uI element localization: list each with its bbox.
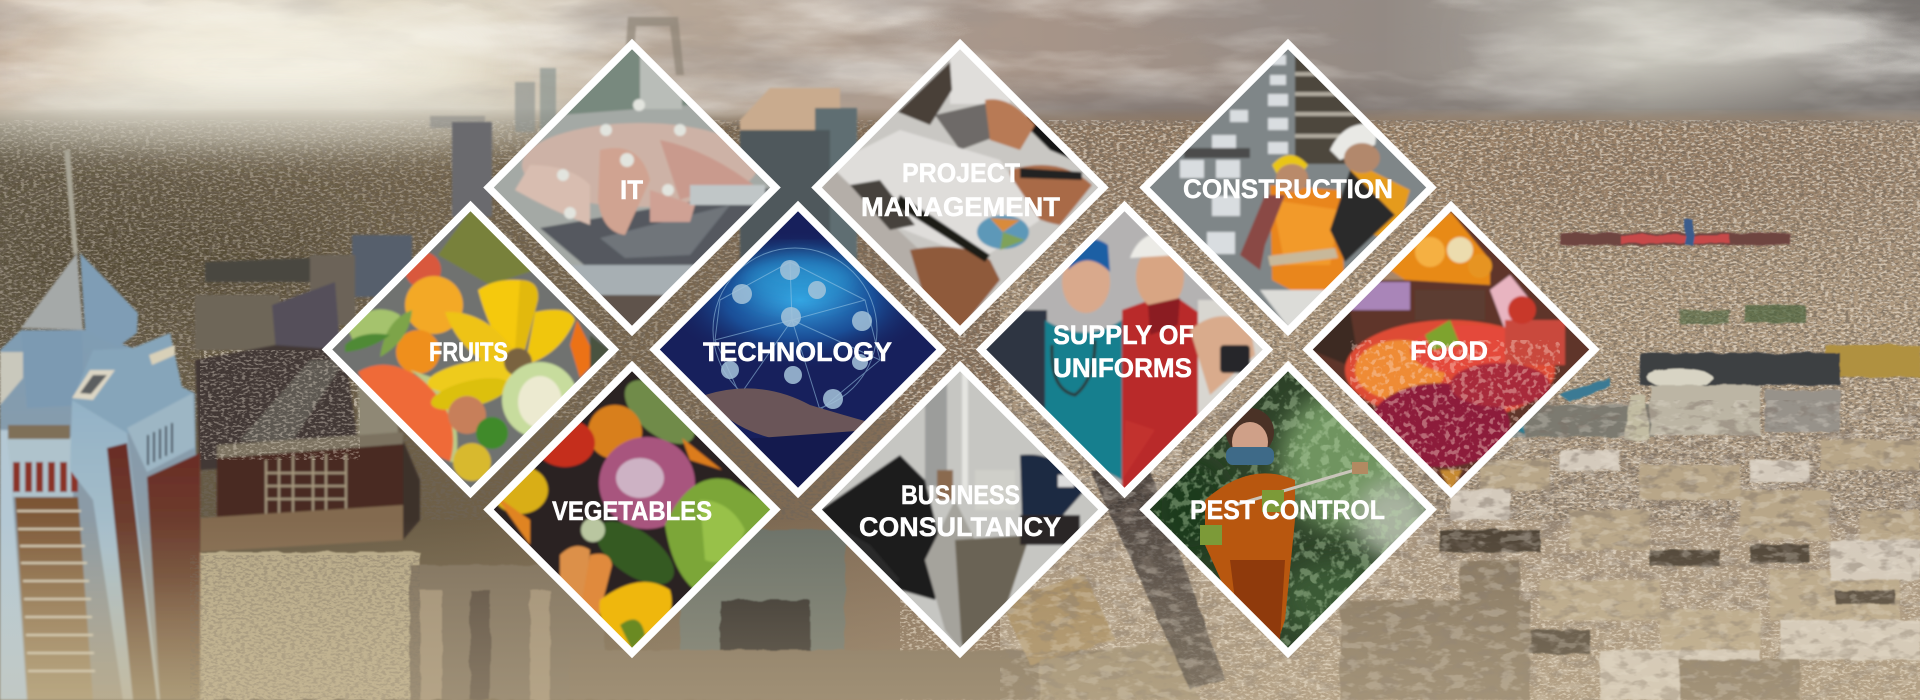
- diamond border: [488, 366, 776, 653]
- label: IT: [620, 175, 643, 205]
- panel: Fruits: [320, 200, 620, 500]
- left tower: [0, 150, 200, 700]
- label: CONSTRUCTION: [1183, 174, 1393, 204]
- panel: Construction: [1140, 40, 1440, 340]
- label: [861, 158, 1061, 222]
- diamond border: [327, 206, 614, 493]
- photo: workers at building site: [1150, 50, 1426, 326]
- panel: Technology: [650, 200, 950, 500]
- foreground parking and buildings: [195, 470, 1225, 700]
- photo: assorted vegetables: [494, 371, 770, 648]
- photo: digital network globe over hand: [660, 212, 936, 488]
- photo: workers in uniforms: [986, 212, 1263, 488]
- diamond border: [981, 206, 1268, 493]
- photo: business meeting: [822, 372, 1098, 648]
- panel: Supply of Uniforms: [975, 200, 1275, 500]
- diamond border: [1144, 44, 1432, 331]
- bottom haze: [0, 547, 1920, 700]
- panel: Pest Control: [1140, 360, 1440, 660]
- sky with storm clouds: [0, 0, 1920, 128]
- label: TECHNOLOGY: [703, 337, 892, 367]
- label: CONSULTANCY: [859, 512, 1061, 542]
- panel: IT: [480, 40, 780, 340]
- label: MANAGEMENT: [861, 192, 1061, 222]
- road traffic texture: [200, 350, 360, 460]
- photo: worker spraying plants: [1150, 372, 1426, 648]
- label: VEGETABLES: [552, 496, 712, 526]
- photo: fruit arrangement: [332, 212, 608, 488]
- horizon haze on the left: [0, 98, 600, 146]
- label: [859, 480, 1061, 542]
- label: [1053, 320, 1194, 383]
- panel: Vegetables: [480, 360, 780, 660]
- diamond border: [1144, 366, 1432, 653]
- label: PEST CONTROL: [1190, 495, 1385, 525]
- panel: Food: [1300, 200, 1600, 500]
- photo: hands on keyboard: [494, 50, 770, 326]
- diamond border: [488, 44, 776, 331]
- label: PROJECT: [902, 158, 1020, 188]
- label: BUSINESS: [901, 480, 1020, 510]
- photo: market stall: [1312, 212, 1590, 488]
- diamond border: [816, 366, 1104, 653]
- label: UNIFORMS: [1053, 353, 1192, 383]
- diamond border: [654, 206, 942, 493]
- panel: Business Consultancy: [810, 360, 1110, 660]
- label: FRUITS: [429, 337, 508, 367]
- label: SUPPLY OF: [1053, 320, 1194, 350]
- label: FOOD: [1410, 336, 1488, 366]
- left mid buildings and road: [195, 235, 420, 552]
- photo: documents and hands: [822, 50, 1098, 326]
- diamond border: [816, 44, 1104, 331]
- kingdom centre and far towers: [430, 17, 857, 280]
- panel: Project Management: [810, 40, 1110, 340]
- diamond border: [1308, 206, 1594, 493]
- right side low-rise blocks: [1340, 220, 1920, 700]
- foreground roof texture: [190, 400, 1920, 700]
